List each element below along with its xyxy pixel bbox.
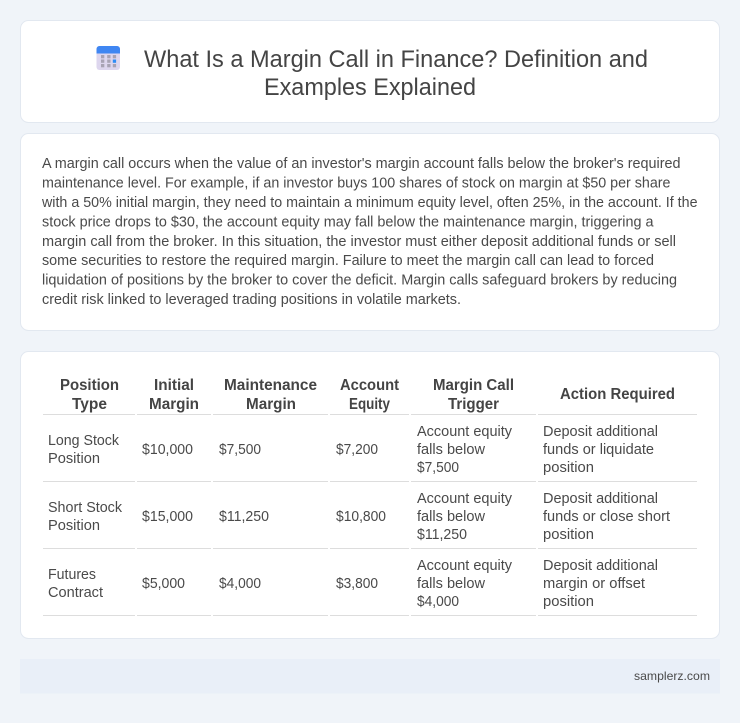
table row: short stock position: $10,800 (336, 509, 386, 525)
table row: futures contract: Contract (48, 585, 103, 601)
text block: definition paragraph: some securities to restore the required margin. Failure to meet the margin call can lead to forced (42, 253, 654, 269)
table row: long stock position (48, 424, 658, 476)
table header row: Margin Call (433, 377, 514, 394)
table row: short stock position: funds or close short (543, 509, 670, 525)
table row: futures contract: $3,800 (336, 576, 378, 592)
table row: short stock position: $11,250 (219, 509, 269, 525)
table header row: Action Required (560, 386, 675, 403)
title: Examples Explained (264, 74, 476, 101)
panel: margin table (20, 352, 720, 638)
icon: calendar (96, 46, 120, 70)
text block: definition paragraph: margin call from the broker. In this situation, the investor must either deposit additional funds or sell (42, 234, 676, 250)
table row: short stock position: Short Stock (48, 500, 123, 516)
panel: header (20, 20, 720, 122)
table header row: Margin (149, 396, 199, 413)
table row: long stock position: $10,000 (142, 442, 193, 458)
text block: definition paragraph: liquidation of positions by the broker to cover the deficit. Margin calls safeguard brokers by reducing (42, 273, 677, 289)
table row: futures contract: $4,000 (417, 594, 459, 610)
table header row: Maintenance (224, 377, 317, 394)
table row: short stock position: $15,000 (142, 509, 193, 525)
table row: short stock position: position (543, 527, 594, 543)
table row: futures contract: $5,000 (142, 576, 185, 592)
table row: long stock position: $7,200 (336, 442, 378, 458)
table row: futures contract: Deposit additional (543, 558, 658, 574)
table header row (60, 377, 675, 413)
title: What Is a Margin Call in Finance? Definition and (144, 46, 648, 73)
table header row: Equity (349, 396, 390, 413)
table header row: Account (340, 377, 399, 394)
text block: definition paragraph: maintenance level. For example, if an investor buys 100 shares of stock on margin at $50 per share (42, 175, 670, 191)
table row: futures contract: Account equity (417, 558, 513, 574)
table row: short stock position: Deposit additional (543, 491, 658, 507)
table header row: Initial (154, 377, 194, 394)
table header row: Position (60, 377, 119, 394)
table row: long stock position: Account equity (417, 424, 513, 440)
footer text: samplerz.com (634, 669, 710, 683)
table row: futures contract: $4,000 (219, 576, 261, 592)
text block: definition paragraph: stock price drops to $30, the account equity may fall below the maintenance margin, triggering a (42, 214, 654, 230)
table row: short stock position: falls below (417, 509, 486, 525)
table row: futures contract: margin or offset (543, 576, 645, 592)
text block: definition paragraph: credit risk linked to leveraged trading positions in volatile markets. (42, 292, 461, 308)
table row: long stock position: Deposit additional (543, 424, 658, 440)
table row: long stock position: falls below (417, 442, 486, 458)
title (144, 46, 648, 101)
text block: definition paragraph: with a 50% initial margin, they need to maintain a minimum equity level, often 25%, in the account. If the (41, 195, 698, 211)
table row: long stock position: $7,500 (219, 442, 261, 458)
footer bar (20, 659, 720, 694)
table row: short stock position: Account equity (417, 491, 513, 507)
table row: futures contract: position (543, 594, 594, 610)
table row: futures contract: Futures (48, 567, 96, 583)
table row: long stock position: position (543, 460, 594, 476)
table row: long stock position: funds or liquidate (543, 442, 654, 458)
table header row: Type (72, 396, 107, 413)
table header row: Trigger (448, 396, 499, 413)
table header row: Margin (246, 396, 296, 413)
table row: short stock position: Position (48, 518, 100, 534)
table row: futures contract (48, 558, 658, 610)
table row: short stock position (48, 491, 670, 543)
table row: futures contract: falls below (417, 576, 486, 592)
table row: long stock position: $7,500 (417, 460, 459, 476)
panel: definition text (20, 134, 720, 330)
text block: definition paragraph (41, 156, 698, 308)
table row: short stock position: $11,250 (417, 527, 467, 543)
table row: long stock position: Long Stock (48, 433, 120, 449)
table row: long stock position: Position (48, 451, 100, 467)
text block: definition paragraph: A margin call occurs when the value of an investor's margin account falls below the broker's required (42, 156, 680, 172)
